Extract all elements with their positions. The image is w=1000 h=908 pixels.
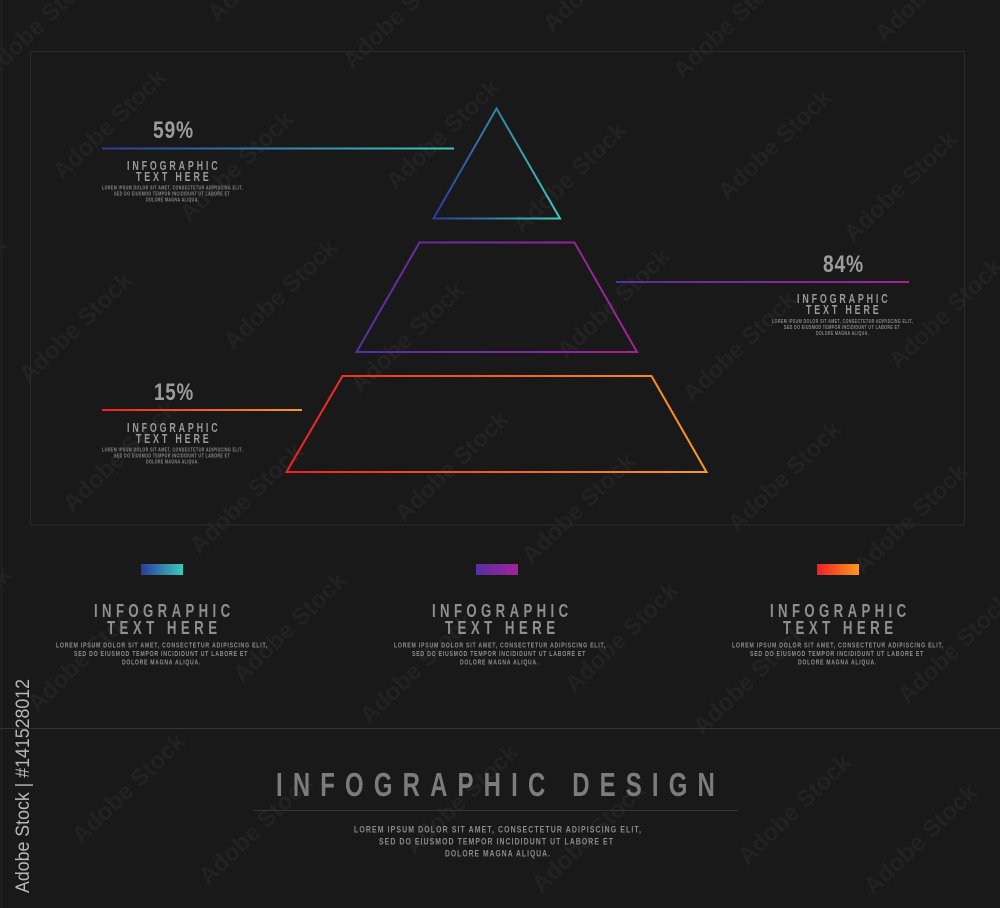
footer divider <box>0 728 1000 730</box>
callout: 59%: LOREM IPSUM DOLOR SIT AMET, CONSECTETUR ADIPISCING ELIT, <box>102 186 243 192</box>
callout: 84%: 84% <box>823 251 864 278</box>
legend item: red: SED DO EIUSMOD TEMPOR INCIDIDUNT UT LABORE ET <box>750 651 924 658</box>
callout: 59%: SED DO EIUSMOD TEMPOR INCIDIDUNT UT LABORE ET <box>114 192 230 198</box>
pyramid top tier <box>434 108 560 218</box>
watermark pattern: Adobe Stock <box>23 595 147 717</box>
footer description <box>354 824 642 860</box>
footer description: DOLORE MAGNA ALIQUA. <box>445 848 551 860</box>
watermark pattern: Adobe Stock <box>219 233 343 355</box>
pyramid bottom tier <box>286 376 706 472</box>
watermark pattern: Adobe Stock <box>560 576 684 698</box>
watermark pattern: Adobe Stock <box>14 266 138 388</box>
watermark pattern: Adobe Stock <box>185 437 309 559</box>
watermark pattern: Adobe Stock <box>400 738 524 860</box>
callout: 84%: INFOGRAPHIC <box>797 292 890 306</box>
watermark pattern: Adobe Stock <box>67 727 191 849</box>
legend item: purple <box>394 564 606 666</box>
watermark pattern: Adobe Stock <box>849 457 973 579</box>
watermark pattern: Adobe Stock <box>517 447 641 569</box>
callout: 84% <box>616 251 913 337</box>
watermark pattern: Adobe Stock <box>678 285 802 407</box>
legend item: purple: SED DO EIUSMOD TEMPOR INCIDIDUNT UT LABORE ET <box>412 651 586 658</box>
pyramid chart <box>286 108 706 472</box>
callout: 15%: LOREM IPSUM DOLOR SIT AMET, CONSECTETUR ADIPISCING ELIT, <box>102 448 243 454</box>
callout: 15%: INFOGRAPHIC <box>127 421 220 435</box>
watermark pattern: Adobe Stock <box>859 778 983 900</box>
legend item: purple: TEXT HERE <box>445 618 560 638</box>
watermark pattern: Adobe Stock <box>58 395 182 517</box>
watermark pattern: Adobe Stock <box>228 566 352 688</box>
watermark pattern: Adobe Stock <box>688 618 812 740</box>
legend item: blue: TEXT HERE <box>107 618 222 638</box>
legend item: red: INFOGRAPHIC <box>770 601 910 621</box>
watermark pattern: Adobe Stock <box>48 63 172 185</box>
footer description: LOREM IPSUM DOLOR SIT AMET, CONSECTETUR ADIPISCING ELIT, <box>354 824 642 836</box>
legend item: blue: SED DO EIUSMOD TEMPOR INCIDIDUNT UT LABORE ET <box>74 651 248 658</box>
watermark pattern: Adobe Stock <box>723 415 847 537</box>
watermark pattern: Adobe Stock <box>355 607 479 729</box>
pyramid middle tier <box>356 242 637 352</box>
legend item: purple: INFOGRAPHIC <box>432 601 572 621</box>
legend item: red <box>732 564 944 666</box>
watermark pattern: Adobe Stock <box>390 405 514 527</box>
callout: 84%: SED DO EIUSMOD TEMPOR INCIDIDUNT UT LABORE ET <box>784 325 900 331</box>
callout: 15%: SED DO EIUSMOD TEMPOR INCIDIDUNT UT LABORE ET <box>114 454 230 460</box>
watermark pattern: Adobe Stock <box>508 116 632 238</box>
callout: 84%: LOREM IPSUM DOLOR SIT AMET, CONSECTETUR ADIPISCING ELIT, <box>772 319 913 325</box>
callout: 15% <box>102 379 302 466</box>
legend item: red: DOLORE MAGNA ALIQUA. <box>798 660 877 666</box>
legend item: blue: LOREM IPSUM DOLOR SIT AMET, CONSECTETUR ADIPISCING ELIT, <box>56 642 268 650</box>
legend item: red: TEXT HERE <box>783 618 898 638</box>
watermark pattern: Adobe Stock <box>381 73 505 195</box>
watermark pattern: Adobe Stock <box>194 768 318 890</box>
callout: 15%: DOLORE MAGNA ALIQUA. <box>146 460 199 466</box>
callout: 15%: TEXT HERE <box>136 432 212 446</box>
callout: 84%: DOLORE MAGNA ALIQUA. <box>816 331 869 337</box>
legend item: purple: LOREM IPSUM DOLOR SIT AMET, CONSECTETUR ADIPISCING ELIT, <box>394 642 606 650</box>
callout: 59%: INFOGRAPHIC <box>127 159 220 173</box>
legend item: blue: DOLORE MAGNA ALIQUA. <box>122 660 201 666</box>
watermark pattern: Adobe Stock <box>733 748 857 870</box>
legend item: blue <box>56 564 268 666</box>
footer description: SED DO EIUSMOD TEMPOR INCIDIDUNT UT LABORE ET <box>379 836 614 848</box>
watermark pattern: Adobe Stock <box>839 125 963 247</box>
watermark pattern: Adobe Stock <box>346 276 470 398</box>
watermark pattern: Adobe Stock <box>175 105 299 227</box>
callout: 15%: 15% <box>154 379 194 406</box>
callout: 59%: DOLORE MAGNA ALIQUA. <box>146 198 199 204</box>
watermark pattern: Adobe Stock <box>552 242 676 364</box>
stock id label: Adobe Stock | #141528012 <box>13 679 34 893</box>
legend item: blue: INFOGRAPHIC <box>94 601 234 621</box>
watermark pattern: Adobe Stock <box>527 776 651 898</box>
legend item: purple: DOLORE MAGNA ALIQUA. <box>460 660 539 666</box>
callout: 59%: TEXT HERE <box>136 170 212 184</box>
watermark pattern: Adobe Stock <box>713 83 837 205</box>
chart frame <box>30 52 964 525</box>
callout: 59%: 59% <box>153 117 194 144</box>
callout: 59% <box>102 117 454 204</box>
callout: 84%: TEXT HERE <box>806 303 882 317</box>
footer title: INFOGRAPHIC DESIGN <box>276 766 725 803</box>
